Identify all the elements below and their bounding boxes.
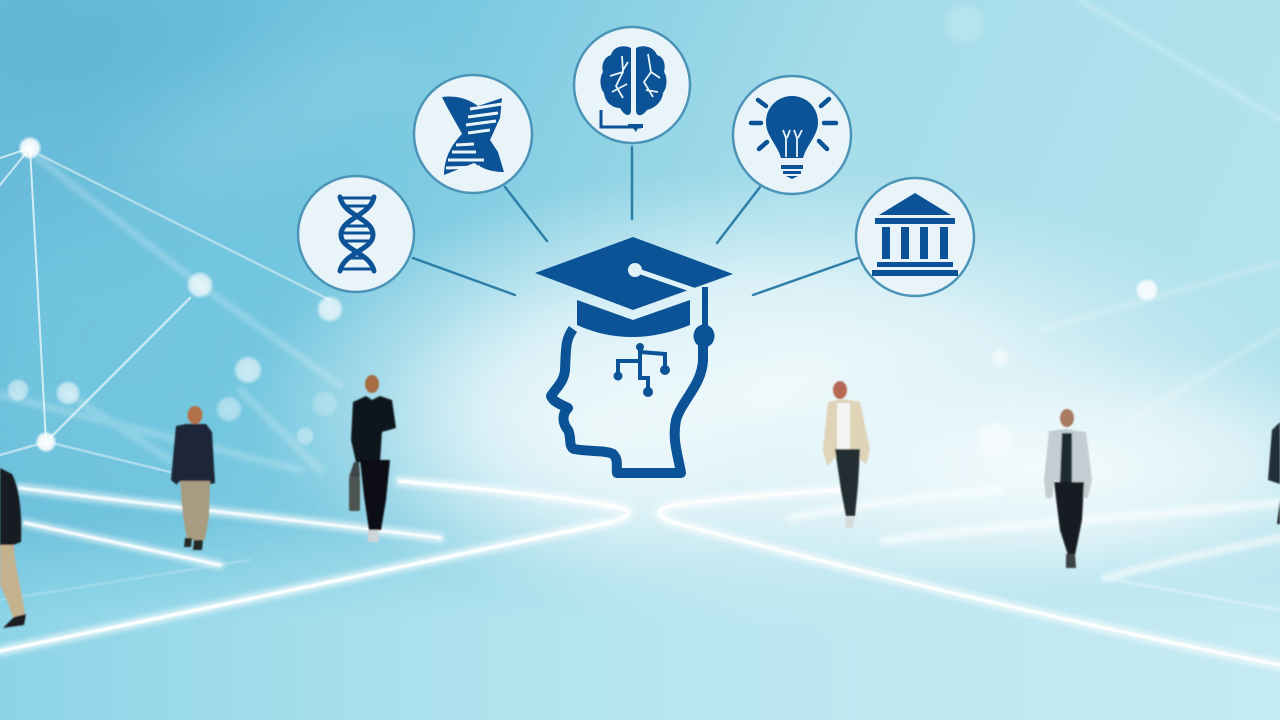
icon circle: institution building — [856, 178, 974, 296]
graduate head emblem — [535, 237, 733, 473]
icon circle: DNA helix — [298, 176, 414, 292]
icon circle: twisted DNA ribbon — [414, 75, 532, 193]
person: walker in grey jacket — [1044, 409, 1092, 568]
person: walker in navy top — [171, 406, 215, 550]
circuit in head — [614, 343, 670, 397]
person: far left walker — [0, 468, 26, 628]
network of glowing nodes — [0, 0, 1280, 472]
head profile outline — [551, 329, 703, 473]
icon circle: light bulb — [733, 76, 851, 194]
icon circle: brain with circuit — [574, 27, 690, 143]
glowing floor lines — [0, 481, 1280, 665]
person: walker in beige jacket — [823, 381, 870, 528]
person: far right walker — [1268, 422, 1280, 524]
connector lines — [413, 147, 858, 295]
person: walker in black suit with bag — [349, 375, 396, 542]
mortarboard cap — [535, 237, 733, 348]
